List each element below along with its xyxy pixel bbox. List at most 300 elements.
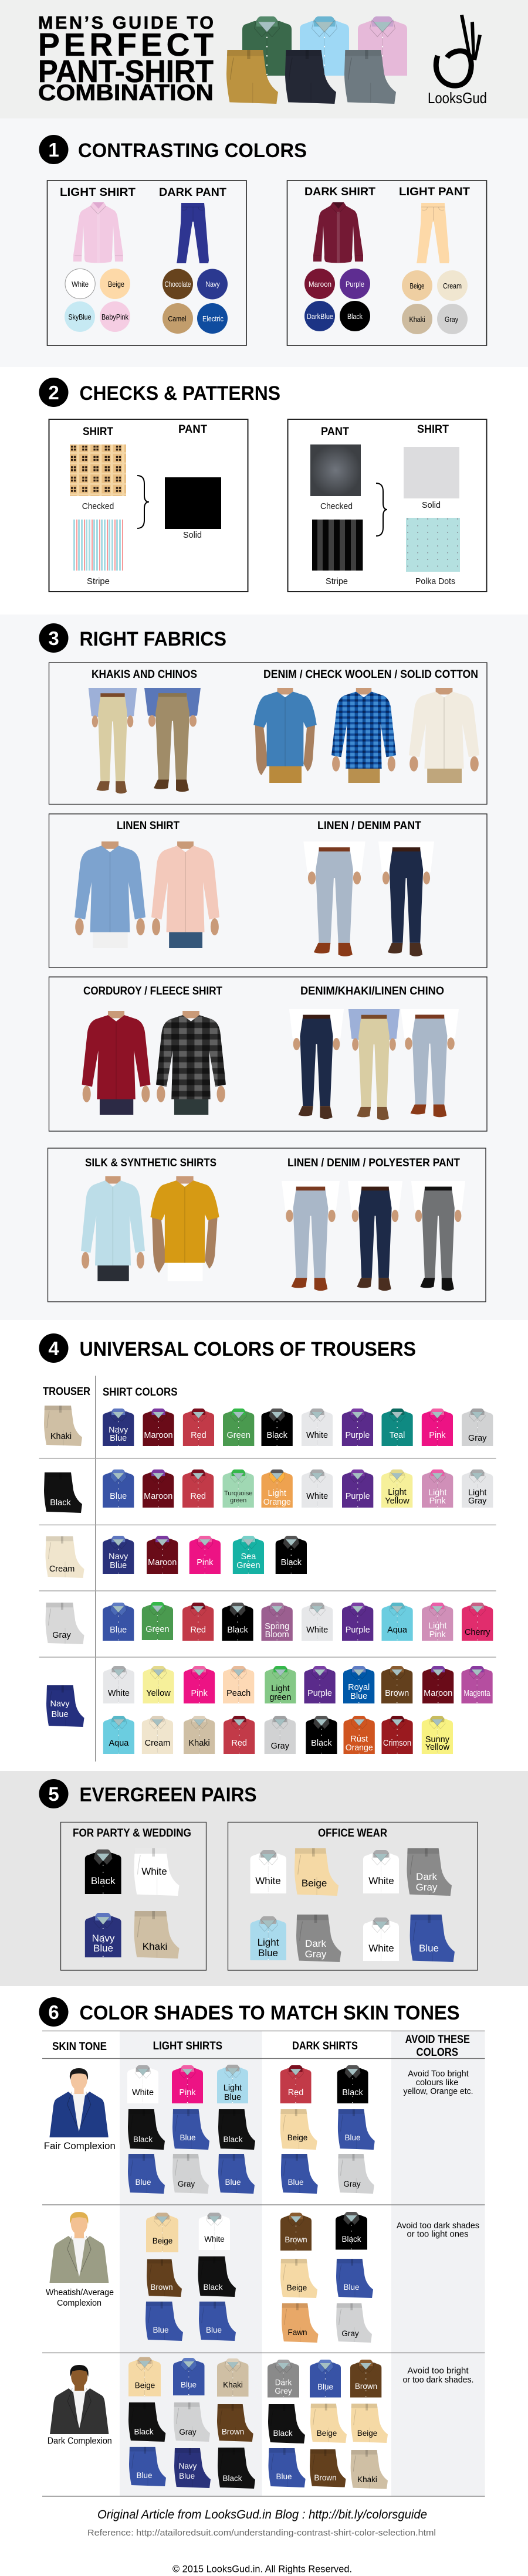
- panel: pant patterns with shirts: SHIRT: [417, 423, 449, 436]
- figure: dark man: [50, 2365, 109, 2434]
- shirt: Maroon: Maroon: [424, 1689, 452, 1698]
- panel: linen: [49, 814, 487, 968]
- photo: chino trousers: [144, 688, 201, 792]
- pant: Black: [198, 2256, 236, 2297]
- shirt: Aqua: [381, 1603, 413, 1641]
- shirt: Black: [276, 1536, 307, 1574]
- shirt: White: [103, 1666, 134, 1703]
- shirt: Light green: green: [269, 1693, 291, 1702]
- panel: light shirt dark pant: LIGHT SHIRT: [60, 186, 136, 199]
- footer: copyright: © 2015 LooksGud.in. All Rights Reserved.: [172, 2564, 352, 2574]
- shirt: Light Pink: [422, 1603, 453, 1641]
- column heading: shirt colors: SHIRT COLORS: [103, 1386, 177, 1399]
- shirt: White: White: [306, 1625, 328, 1635]
- section 5 heading: EVERGREEN PAIRS: [80, 1784, 257, 1806]
- brace: [376, 483, 387, 536]
- shirt: Light Yellow: [381, 1469, 412, 1508]
- trouser: Cream: Cream: [49, 1564, 75, 1574]
- swatch: Gray: [437, 304, 468, 334]
- shirt: Gray: Gray: [271, 1742, 290, 1751]
- shirt: Aqua: Aqua: [109, 1739, 129, 1748]
- avoid note: yellow, Orange etc.: [404, 2087, 473, 2096]
- label: Wheatish/Average Complexion: Wheatish/Average: [46, 2287, 114, 2297]
- section 1 background: [0, 118, 528, 367]
- pant: White: [134, 1848, 180, 1896]
- shirt: White: [302, 1603, 333, 1641]
- shirt: White: White: [306, 1492, 328, 1501]
- pant: Navy Blue: [174, 2448, 211, 2488]
- row: dark complexion: [48, 2357, 474, 2489]
- pant: Blue: Blue: [180, 2133, 196, 2142]
- table header: AVOID THESE: [405, 2034, 470, 2046]
- shirt: Brown: Brown: [355, 2382, 377, 2391]
- swatch: Chocolate: Chocolate: [164, 280, 191, 289]
- shirt: Blue: Blue: [181, 2381, 197, 2390]
- swatch: stripe pant: Stripe: [326, 577, 348, 586]
- panel: office wear: OFFICE WEAR: [318, 1827, 387, 1839]
- shirt: Light Blue: Blue: [224, 2093, 241, 2102]
- shirt: Light green: Light: [271, 1684, 290, 1693]
- shirt: Light Orange: Orange: [263, 1498, 291, 1507]
- pant: Black: [128, 2402, 165, 2442]
- pant: Beige: [280, 2259, 317, 2298]
- shirt: Sea Green: Green: [236, 1561, 260, 1570]
- shirt: Royal Blue: Royal: [348, 1683, 370, 1692]
- pant: Blue: [218, 2154, 255, 2194]
- photo: blue linen shirt: [75, 841, 145, 948]
- pant: Black: [218, 2448, 255, 2489]
- footer: reference: Reference: http://atailoredsuit.com/understanding-contrast-shirt-color-selection.html: [87, 2528, 436, 2538]
- pant: Blue: [145, 2302, 183, 2341]
- pant: Black: Black: [203, 2283, 223, 2292]
- swatch: Khaki: [402, 304, 432, 334]
- avoid note: [404, 2069, 473, 2096]
- shirt: Black: [222, 1603, 253, 1641]
- shirt: Pink: Pink: [191, 1689, 208, 1698]
- photo: khaki trousers: [89, 688, 137, 793]
- shirt: Beige: [146, 2213, 178, 2252]
- shirt: Maroon: [143, 1409, 174, 1446]
- shirt: Black: Black: [227, 1625, 248, 1635]
- shirt: Navy Blue: [85, 1913, 121, 1957]
- avoid note: Avoid too dark shades: [397, 2221, 479, 2231]
- section 3 heading: RIGHT FABRICS: [80, 628, 226, 650]
- section 2 heading: [39, 378, 280, 407]
- label: Dark Complexion: Dark Complexion: [48, 2436, 112, 2446]
- photo: denim pant: [378, 841, 434, 956]
- panel: pant patterns with shirts: PANT: [321, 425, 349, 438]
- shirt: White: [302, 1409, 333, 1446]
- shirt: Blue: [310, 2360, 341, 2398]
- swatch: polka dots shirt: Polka Dots: [415, 577, 455, 586]
- shirt: Light Blue: Light: [224, 2083, 242, 2093]
- photo: red corduroy shirt: [82, 1011, 150, 1115]
- shirt: Khaki: [184, 1716, 215, 1754]
- title: PERFECT: [38, 26, 214, 63]
- logo: LooksGud: [428, 89, 487, 107]
- pant: Blue: Blue: [136, 2471, 153, 2480]
- shirt: Pink: Pink: [197, 1558, 214, 1567]
- table header: COLORS: [417, 2046, 458, 2059]
- shirt: Black: [306, 1716, 337, 1754]
- shirt: Maroon: [143, 1469, 174, 1508]
- logo: [428, 15, 487, 107]
- shirt: Cherry: [462, 1603, 493, 1641]
- shirt: Navy Blue: Navy: [109, 1552, 128, 1562]
- shirt: Black: Black: [311, 1739, 332, 1748]
- label: Fair Complexion: Fair Complexion: [44, 2141, 116, 2151]
- shirt: White: White: [108, 1689, 130, 1698]
- pant: Beige: Beige: [287, 2133, 307, 2142]
- swatch: Electric: [197, 303, 228, 334]
- section 6 heading: [39, 1997, 460, 2027]
- row: black trouser: [44, 1469, 493, 1513]
- shirt: Light Pink: [422, 1469, 453, 1508]
- pant: Black: Black: [133, 2135, 153, 2144]
- panel: silk and synthetic: [48, 1148, 486, 1302]
- shirt: Pink: [189, 1536, 221, 1574]
- shirt: Teal: [381, 1409, 413, 1446]
- pant: Gray: Gray: [343, 2180, 361, 2188]
- panel: pant patterns with shirts: [287, 419, 487, 592]
- row: fair complexion: [44, 2065, 473, 2194]
- panel: khakis and denim: DENIM / CHECK WOOLEN / SOLID COTTON: [263, 668, 478, 681]
- swatch: BabyPink: [100, 301, 130, 332]
- shirt: Light green: [265, 1666, 296, 1703]
- pant: Black: [128, 2109, 165, 2150]
- photo: linen pant: [282, 1181, 340, 1291]
- photo: polyester pant: [411, 1181, 465, 1291]
- row: khaki trouser: [44, 1406, 493, 1446]
- swatch: Gray: Gray: [445, 315, 459, 324]
- pant: Gray: Gray: [341, 2329, 359, 2338]
- photo: denim pant: [289, 1009, 344, 1119]
- shirt: Navy Blue: Navy: [109, 1426, 128, 1435]
- trouser: Navy Blue: Blue: [51, 1710, 69, 1719]
- panel: for party and wedding: [61, 1822, 207, 1970]
- pant: Blue: [338, 2109, 375, 2150]
- pant: Blue: [199, 2302, 236, 2341]
- section 2 background: [0, 367, 528, 615]
- swatch: solid shirt: [404, 447, 459, 510]
- shirt: Red: Red: [288, 2088, 303, 2098]
- section 4 heading: [39, 1333, 416, 1363]
- row: gray trouser: [46, 1602, 493, 1644]
- swatch: stripe shirt: [73, 520, 123, 586]
- photo: denim pant: [348, 1181, 402, 1291]
- pant: Beige: [280, 2109, 317, 2150]
- trouser: Black: Black: [50, 1498, 71, 1508]
- shirt: Peach: [223, 1666, 254, 1703]
- swatch: stripe shirt: Stripe: [87, 577, 110, 586]
- swatch: Cream: [437, 270, 468, 301]
- shirt: Purple: Purple: [346, 1625, 370, 1635]
- photo: linen pant: [303, 841, 365, 956]
- photo: khaki pant: [348, 1009, 400, 1120]
- shirt: Purple: [342, 1603, 373, 1641]
- pant: Fawn: Fawn: [287, 2328, 307, 2337]
- swatch: Camel: [163, 303, 193, 334]
- pant: Dark Gray: [407, 1848, 452, 1896]
- pant: Navy Blue: Navy: [179, 2462, 197, 2470]
- shirt: Navy Blue: Navy: [92, 1933, 115, 1944]
- footer: original article: Original Article from LooksGud.in Blog : http://bit.ly/colorsguide: [97, 2508, 427, 2521]
- section 4 heading: UNIVERSAL COLORS OF TROUSERS: [80, 1338, 416, 1360]
- shirt: Brown: [280, 2213, 312, 2251]
- swatch: Camel: Camel: [168, 315, 187, 323]
- swatch: White: White: [72, 280, 89, 289]
- panel: khakis and denim: KHAKIS AND CHINOS: [92, 668, 197, 681]
- pant: Blue: Blue: [419, 1943, 439, 1954]
- avoid note: colours like: [416, 2078, 458, 2088]
- pant: Dark Gray: Dark: [416, 1871, 437, 1882]
- avoid note: or too dark shades.: [402, 2375, 474, 2385]
- shirt: Sunny Yellow: Sunny: [425, 1735, 450, 1745]
- section 5 background: [0, 1771, 528, 1986]
- panel: office wear: [228, 1822, 478, 1970]
- shirt: Brown: [381, 1666, 412, 1703]
- panel: silk and synthetic: SILK & SYNTHETIC SHIRTS: [85, 1157, 216, 1169]
- shirt: Cream: Cream: [145, 1739, 170, 1748]
- shirt: Sea Green: Sea: [241, 1552, 256, 1562]
- swatch: stripe pant: [312, 520, 363, 586]
- section 4 heading: 4: [48, 1338, 59, 1359]
- shirt: Cream: [142, 1716, 173, 1754]
- shirt: Blue: [103, 1469, 134, 1508]
- pant: Gray: [336, 2303, 372, 2343]
- avoid note: Avoid Too bright: [408, 2069, 469, 2079]
- shirt: Light Gray: Light: [468, 1488, 486, 1498]
- shirt: Yellow: Yellow: [146, 1689, 171, 1698]
- shirt: Dark Grey: [268, 2360, 299, 2398]
- shirt: Light Blue: [250, 1916, 286, 1960]
- photo: white cotton shirt: [409, 688, 479, 783]
- shirt: Pink: [422, 1409, 453, 1446]
- panel: linen: LINEN SHIRT: [117, 820, 180, 832]
- shirt: Beige: Beige: [153, 2236, 172, 2245]
- photo: check shirt: [331, 688, 396, 783]
- shirt: Khaki: Khaki: [188, 1739, 210, 1748]
- section 6 heading: 6: [48, 2001, 59, 2023]
- swatch: DarkBlue: [304, 301, 335, 331]
- shirt: Light Yellow: Light: [388, 1488, 407, 1497]
- pant: Blue: Blue: [343, 2283, 360, 2292]
- pant: Blue: Blue: [276, 2472, 292, 2481]
- title: [38, 13, 214, 106]
- pant: Gray: [338, 2154, 374, 2194]
- pant: Brown: [310, 2449, 346, 2487]
- pant: Blue: Blue: [225, 2178, 241, 2187]
- pant: Navy Blue: Blue: [179, 2472, 195, 2480]
- shirt: Turquoise green: Turquoise: [224, 1490, 252, 1497]
- shirt: Crimson: Crimson: [383, 1739, 411, 1748]
- trouser: Black: [44, 1472, 82, 1513]
- pant: Beige: Beige: [317, 2429, 337, 2438]
- shirt: Light Gray: [462, 1469, 493, 1508]
- panel: silk and synthetic: LINEN / DENIM / POLYESTER PANT: [287, 1157, 460, 1169]
- swatch: BabyPink: BabyPink: [101, 313, 129, 321]
- swatch: checked pant: [310, 444, 361, 511]
- figure: wheatish man: [49, 2212, 109, 2283]
- shirt: Light Gray: Gray: [468, 1496, 487, 1506]
- swatch: Maroon: [304, 269, 335, 299]
- shirt: Purple: Purple: [345, 1431, 370, 1440]
- trouser: Khaki: [44, 1406, 82, 1446]
- shirt: Sea Green: [233, 1536, 264, 1574]
- shirt: Pink: Pink: [429, 1431, 446, 1440]
- panel: light shirt dark pant: [47, 181, 246, 345]
- shirt: Teal: Teal: [390, 1431, 405, 1440]
- shirt: Gray: Gray: [468, 1434, 487, 1443]
- shirt: Navy Blue: Blue: [110, 1434, 127, 1443]
- pant: Blue: [128, 2154, 165, 2194]
- avoid note: or too light ones: [407, 2229, 468, 2239]
- shirt: White: White: [204, 2235, 225, 2244]
- shirt: Blue: [103, 1603, 134, 1641]
- shirt: Black: Black: [341, 2235, 361, 2244]
- shirt: Black: [337, 2065, 368, 2103]
- shirt: White: White: [368, 1943, 394, 1954]
- pant: Blue: [410, 1915, 455, 1962]
- shirt: Spring Bloom: Bloom: [265, 1630, 289, 1640]
- panel: khakis and denim: [49, 663, 487, 805]
- shirt: Black: [336, 2212, 367, 2249]
- title: COMBINATION: [38, 80, 214, 106]
- section 2 heading: 2: [48, 382, 59, 403]
- pant: Blue: Blue: [344, 2133, 361, 2142]
- shirt: Black: Black: [266, 1431, 288, 1440]
- shirt: Light Orange: [262, 1469, 293, 1508]
- pant: Gray: [174, 2402, 210, 2442]
- shirt: Magenta: [461, 1666, 493, 1703]
- shirt: Aqua: Aqua: [387, 1625, 408, 1635]
- swatch: Navy: [197, 269, 228, 299]
- shirt: Purple: Purple: [346, 1492, 370, 1501]
- pant: Brown: [147, 2259, 182, 2297]
- shirt: Purple: [342, 1469, 373, 1508]
- shirt: White: [363, 1850, 399, 1893]
- shirt: White: White: [368, 1875, 394, 1886]
- pant: Khaki: Khaki: [143, 1941, 167, 1952]
- panel: dark shirt light pant: DARK SHIRT: [304, 185, 375, 198]
- shirt: Light Pink: Pink: [429, 1630, 446, 1640]
- shirt: Dark Grey: Dark: [275, 2378, 292, 2387]
- shirt: Black: [85, 1849, 121, 1894]
- shirt: Red: Red: [191, 1431, 207, 1440]
- pant: Black: [218, 2109, 255, 2150]
- shirt: Light Blue: [217, 2065, 248, 2103]
- swatch: checked shirt: [70, 444, 126, 511]
- shirt: Navy Blue: [103, 1409, 134, 1446]
- shirt: Green: [223, 1409, 254, 1446]
- trouser: Khaki: Khaki: [50, 1432, 72, 1441]
- swatch: polka dots shirt: [406, 518, 460, 586]
- shirt: Navy Blue: Blue: [110, 1561, 127, 1570]
- table header: DARK SHIRTS: [292, 2040, 358, 2052]
- shirt: Navy Blue: [103, 1536, 134, 1574]
- shirt: Gray: [265, 1716, 296, 1754]
- pant: Gray: Gray: [179, 2428, 197, 2436]
- swatch: checked pant: Checked: [320, 502, 353, 511]
- swatch: solid pant: [165, 477, 221, 540]
- photo: linen chino: [401, 1009, 459, 1117]
- shirt: Maroon: Maroon: [144, 1431, 173, 1440]
- pant: Khaki: [134, 1911, 180, 1959]
- pant: Blue: [129, 2447, 166, 2486]
- pant: Beige: [351, 2404, 388, 2443]
- shirt: Magenta: Magenta: [463, 1689, 490, 1698]
- header background: [0, 0, 528, 118]
- trouser: Navy Blue: Navy: [50, 1699, 70, 1709]
- panel: for party and wedding: FOR PARTY & WEDDING: [73, 1827, 191, 1839]
- pant: Blue: [281, 2154, 318, 2194]
- shirt: Royal Blue: [343, 1666, 374, 1703]
- shirt: Red: [224, 1716, 255, 1754]
- swatch: Beige: Beige: [108, 280, 124, 289]
- swatch: solid pant: Solid: [183, 531, 202, 540]
- photo: denim shirt: [253, 688, 317, 783]
- shirt: Turquoise green: green: [230, 1497, 246, 1504]
- shirt: Black: [262, 1409, 293, 1446]
- row: cream trouser: [46, 1536, 307, 1578]
- pant: Dark Gray: Dark: [305, 1938, 326, 1949]
- row: navy blue trouser: [46, 1666, 493, 1754]
- panel: shirt patterns with solid pant: PANT: [178, 423, 207, 436]
- shirt: Brown: Brown: [385, 1689, 409, 1698]
- pant: White: White: [141, 1866, 167, 1877]
- pant: Black: Black: [223, 2135, 243, 2144]
- avoid note: [402, 2367, 474, 2385]
- pant: Blue: [336, 2259, 373, 2298]
- shirt: Brown: [350, 2360, 381, 2398]
- panel: light shirt dark pant: DARK PANT: [159, 186, 226, 199]
- pant: Gray: [172, 2154, 209, 2194]
- shirt: Blue: Blue: [317, 2382, 333, 2391]
- shirt: Red: [182, 1469, 214, 1508]
- photo: pink linen shirt: [151, 841, 219, 948]
- shirt: Peach: Peach: [226, 1689, 251, 1698]
- photo: yellow silk shirt: [150, 1176, 219, 1281]
- table header: [52, 2034, 470, 2059]
- pant: Brown: Brown: [222, 2428, 244, 2436]
- brace: [137, 476, 149, 528]
- pant: Blue: Blue: [135, 2178, 151, 2187]
- shirt: Purple: [304, 1666, 336, 1703]
- pant: Beige: [310, 2404, 347, 2443]
- shirt: Red: Red: [190, 1492, 206, 1501]
- shirt: Red: [182, 1603, 214, 1641]
- table header: SKIN TONE: [52, 2041, 107, 2053]
- section 1 heading: 1: [48, 139, 59, 161]
- shirt: Rust Orange: [344, 1716, 375, 1754]
- table header: LIGHT SHIRTS: [153, 2040, 222, 2052]
- shirt: Yellow: [143, 1666, 174, 1703]
- shirt: White: [250, 1850, 286, 1893]
- shirt: Navy Blue: Blue: [93, 1943, 113, 1954]
- shirt: Rust Orange: Rust: [350, 1735, 368, 1744]
- shirt: Blue: [173, 2358, 204, 2395]
- shirt: Purple: [342, 1409, 373, 1446]
- shirt: Royal Blue: Blue: [350, 1692, 367, 1701]
- swatch: Black: Black: [347, 313, 363, 321]
- pant: Beige: [295, 1848, 339, 1896]
- label: Wheatish/Average Complexion: [46, 2287, 114, 2308]
- pant: Khaki: [351, 2450, 388, 2489]
- shirt: White: White: [132, 2088, 154, 2098]
- shirt: Black: Black: [91, 1875, 116, 1886]
- shirt: Turquoise green: [223, 1469, 254, 1508]
- section 2 heading: CHECKS & PATTERNS: [80, 382, 280, 405]
